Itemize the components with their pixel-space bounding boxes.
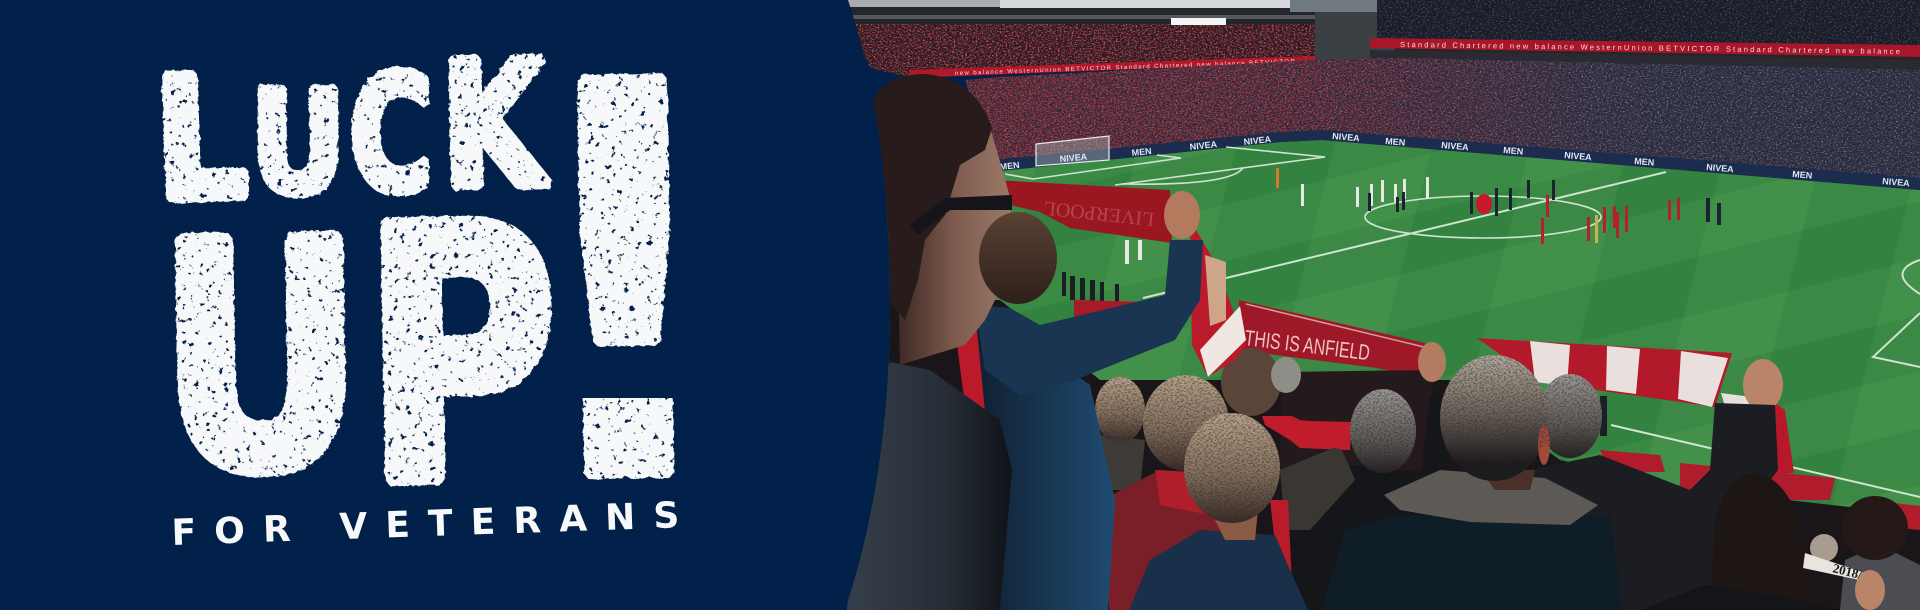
advertising boards: NIVEA — [1189, 139, 1218, 152]
letter L: L — [151, 40, 251, 239]
logo: Luck Up! — [151, 0, 736, 603]
scarf one, with crest — [995, 180, 1246, 377]
small grey head, right — [1810, 534, 1838, 562]
advertising boards: NIVEA — [1706, 162, 1735, 174]
subtitle: for veterans: FOR VETERANS — [171, 495, 680, 554]
pitch lines — [1005, 147, 1920, 497]
letter U large: U — [156, 175, 366, 542]
advertising boards: NIVEA — [1441, 140, 1470, 152]
upper left stand crowd — [856, 24, 1315, 76]
fan hand holding striped scarf — [1743, 359, 1783, 411]
fan brown hair with red collar — [1221, 348, 1345, 450]
2018/19 scarf: 2018/19 — [1831, 560, 1877, 585]
hair texture on heads — [1095, 355, 1602, 523]
letter C: C — [349, 41, 433, 228]
advertising boards: MEN — [1131, 146, 1152, 158]
lower stand crowd — [960, 55, 1920, 185]
advertising boards: NIVEA — [1332, 131, 1361, 143]
fan with dark hair, right — [1840, 496, 1920, 610]
upper right advertising banner: Standard Chartered new balance WesternUnion BETVICTOR Standard Chartered new balance — [1400, 40, 1900, 56]
fan with long hair — [1641, 473, 1790, 610]
striped scarf — [1477, 338, 1794, 473]
scarf: this is anfield — [1238, 300, 1425, 370]
raised hand, fan one — [1164, 191, 1200, 239]
advertising boards: NIVEA — [1243, 134, 1272, 147]
players on pitch — [1125, 168, 1721, 264]
hand, bottom right — [1855, 570, 1885, 610]
grey cap fan — [1271, 357, 1301, 393]
goal — [1036, 136, 1109, 166]
letter U: U — [250, 60, 346, 226]
fan grey hair with dark jacket — [1280, 389, 1440, 530]
crowd behind centre — [1280, 370, 1440, 470]
red scarf hanging near fan — [1270, 500, 1292, 574]
lower red scarves behind fans — [1600, 450, 1920, 530]
man in foreground — [847, 74, 1012, 610]
fan in red jacket — [1108, 375, 1228, 610]
left red scarf — [957, 310, 985, 412]
hand holding anfield scarf — [1418, 342, 1446, 382]
child at front with navy jacket — [1129, 413, 1308, 610]
advertising boards: NIVEA — [1564, 150, 1593, 162]
pitch-side officials — [1062, 272, 1607, 436]
upper right stand crowd — [1377, 0, 1920, 48]
small blonde fan — [1095, 377, 1145, 490]
advertising boards: MEN — [1385, 136, 1406, 148]
stadium photo — [840, 0, 1920, 610]
letter P: P — [360, 153, 562, 563]
stadium roof — [840, 0, 1920, 62]
advertising boards: MEN — [1792, 169, 1813, 181]
poppy wreath — [1476, 194, 1492, 214]
advertising boards: MEN — [999, 160, 1020, 172]
goal: NIVEA — [1059, 152, 1088, 164]
football pitch — [850, 140, 1920, 560]
advertising boards — [991, 130, 1920, 190]
background scarf behind fans — [1074, 300, 1138, 317]
upper left advertising banner — [909, 56, 1315, 78]
floodlights — [1171, 18, 1226, 25]
letter K: K — [440, 25, 550, 227]
fan in blue jacket with raised arm — [975, 240, 1203, 610]
scarf one, with crest: LIVERPOOL — [1043, 197, 1155, 230]
advertising boards: MEN — [1634, 156, 1655, 168]
main fan with hood — [1322, 355, 1622, 610]
crowd underlay — [850, 300, 1920, 610]
second fan head over face — [979, 212, 1057, 304]
advertising boards: MEN — [1503, 145, 1524, 157]
upper left advertising banner: new balance WesternUnion BETVICTOR Standard Chartered new balance BETVICTOR — [955, 59, 1296, 77]
fan with dark jacket, arm raised — [1529, 374, 1778, 610]
advertising boards: NIVEA — [1882, 176, 1911, 188]
2018/19 scarf — [1803, 553, 1864, 580]
scarf: this is anfield: THIS IS ANFIELD — [1243, 327, 1371, 366]
lower stand strip — [1370, 50, 1920, 72]
